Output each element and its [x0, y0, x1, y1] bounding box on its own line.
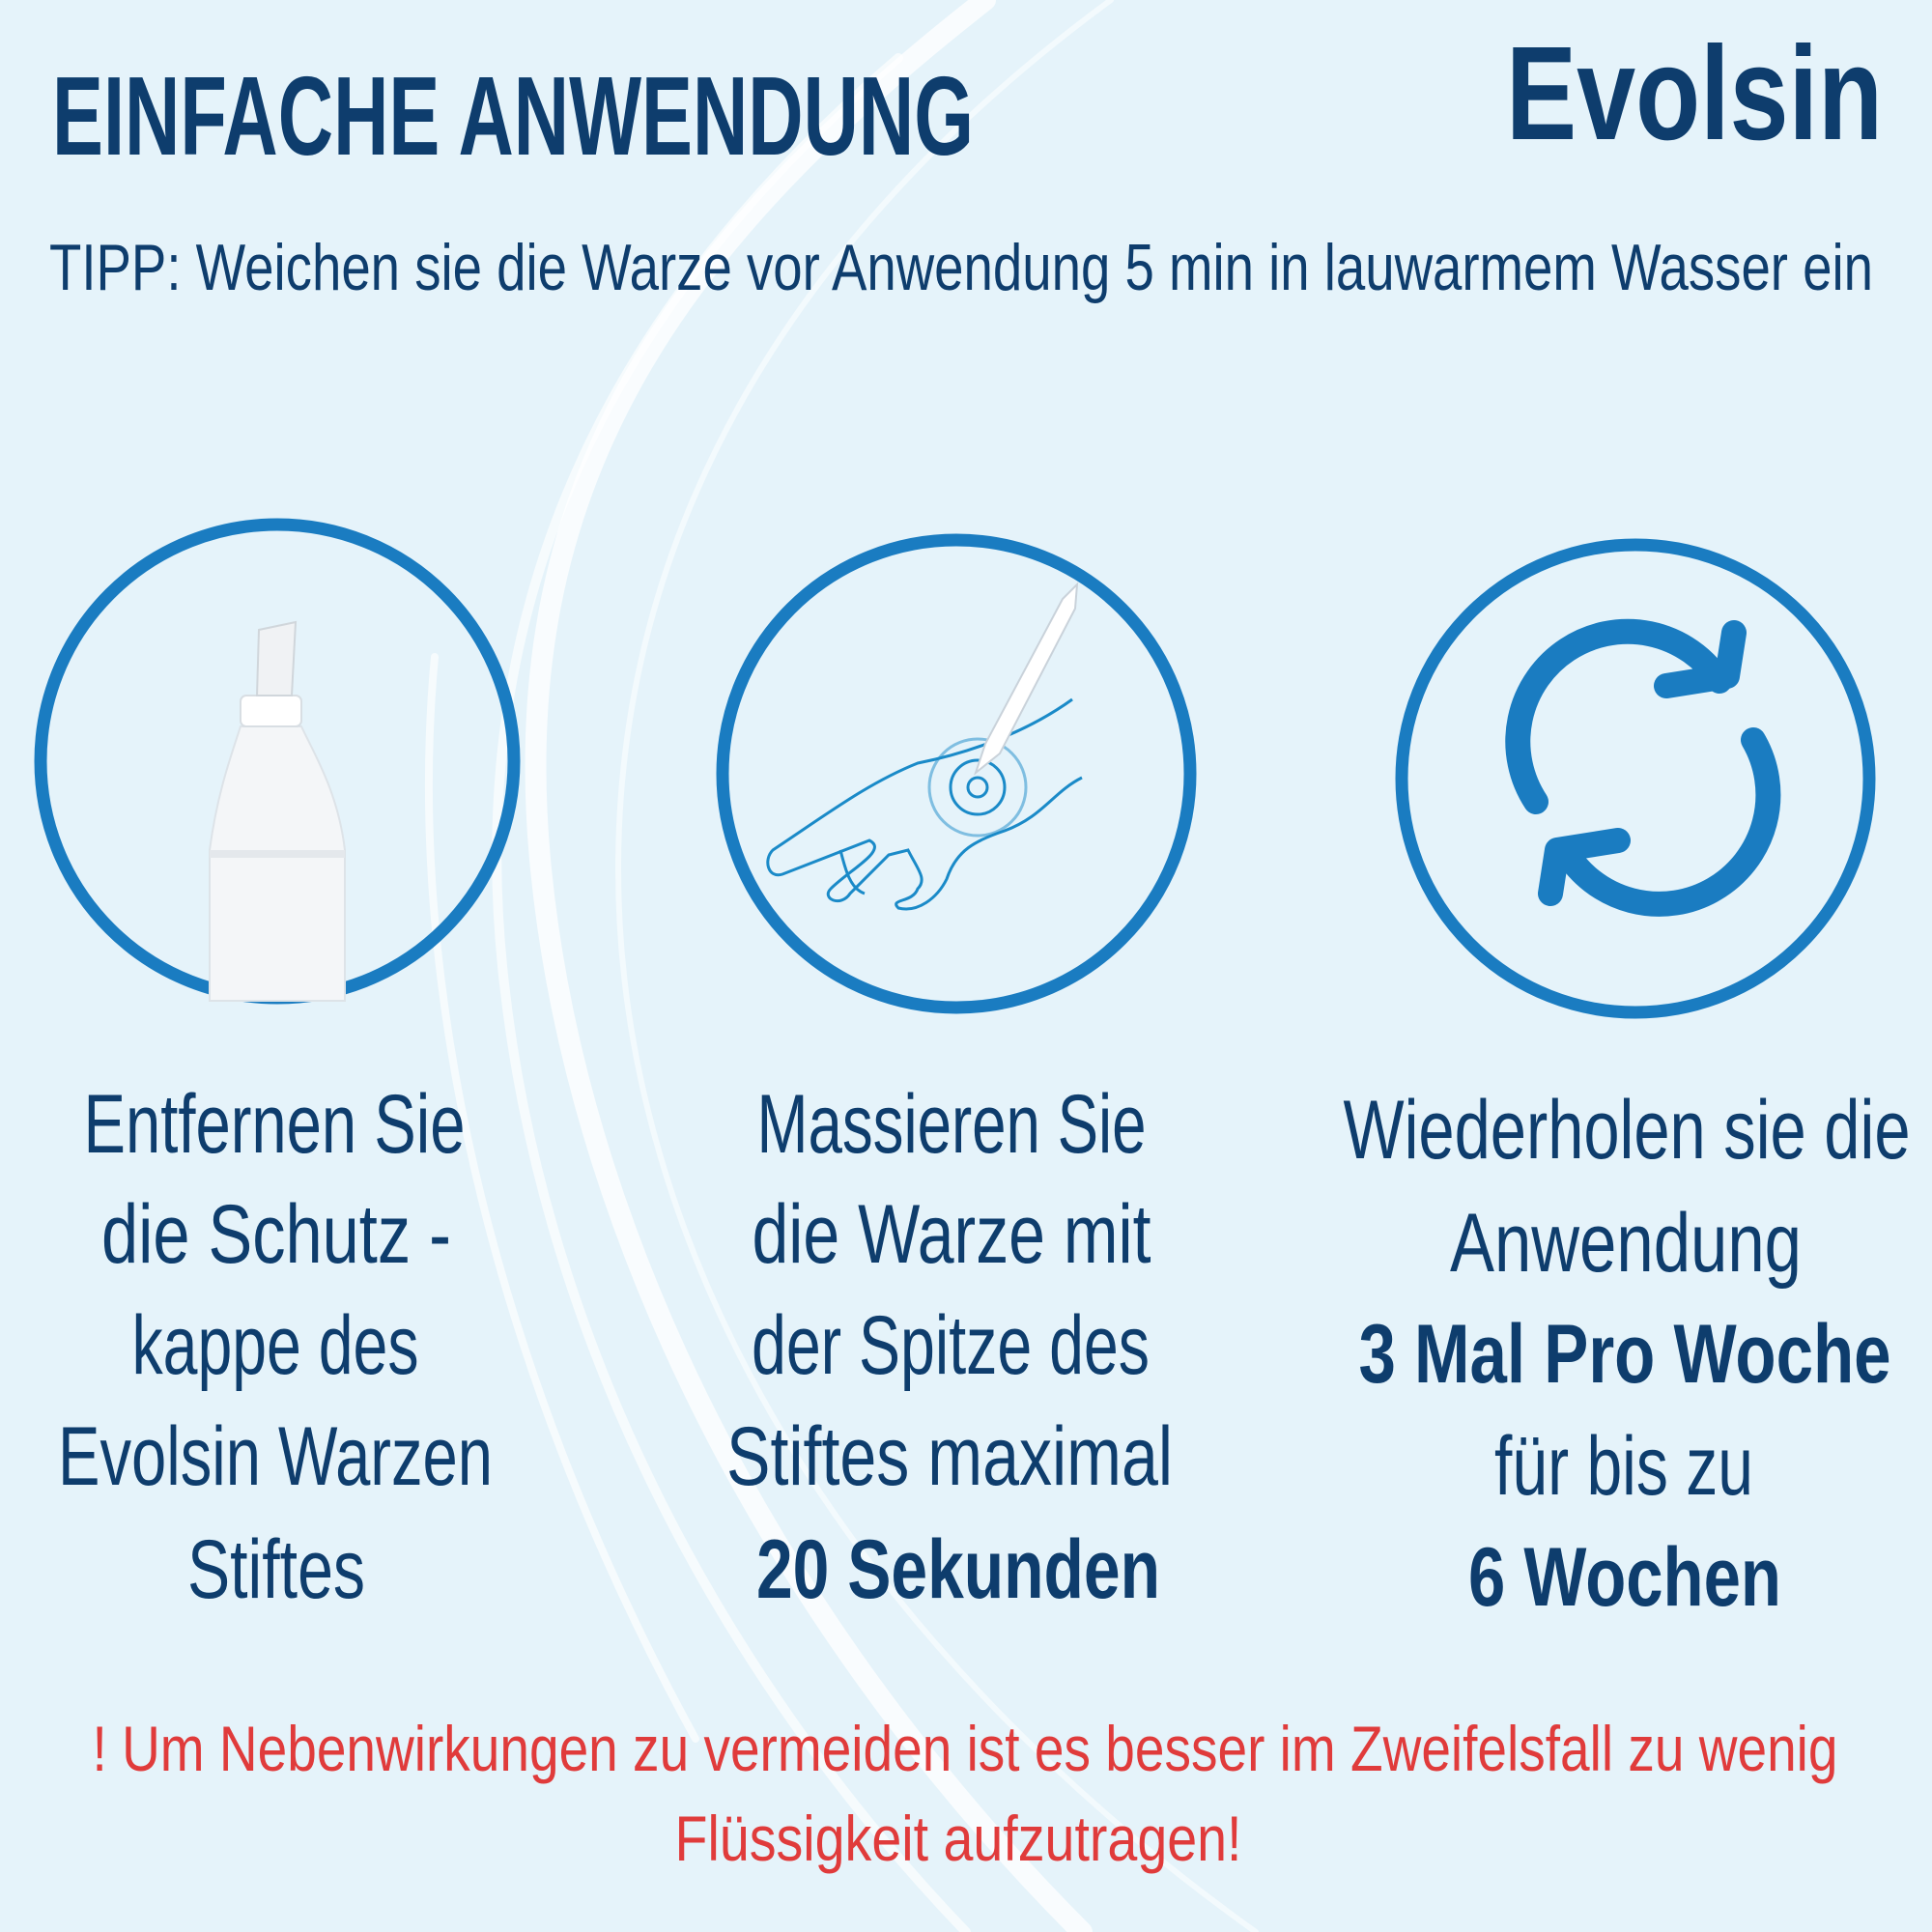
text: step 2	[726, 1078, 1173, 1616]
text: step 1	[58, 1078, 493, 1616]
text: step 1: kappe des	[131, 1299, 419, 1392]
text: step 3	[1343, 1084, 1911, 1624]
text: step 1: Evolsin Warzen	[58, 1410, 493, 1503]
text: step 3: für bis zu	[1494, 1420, 1753, 1513]
icon: hand circle	[723, 540, 1190, 1008]
text: step 3: 6 Wochen	[1468, 1531, 1781, 1624]
text: step 2: die Warze mit	[752, 1188, 1151, 1281]
text: step 2: der Spitze des	[752, 1299, 1150, 1392]
text: step 3: Anwendung	[1450, 1197, 1802, 1290]
icon: pen circle	[41, 525, 514, 1001]
text: step 1: die Schutz -	[101, 1188, 451, 1281]
text: step 1: Stiftes	[187, 1523, 365, 1616]
text: step 2: Massieren Sie	[757, 1078, 1146, 1171]
title: EINFACHE ANWENDUNG	[52, 53, 974, 179]
icon: repeat circle	[1402, 545, 1869, 1012]
text: step 2: Stiftes maximal	[726, 1410, 1173, 1503]
text: step 2: 20 Sekunden	[756, 1523, 1160, 1616]
warning text: Flüssigkeit aufzutragen!	[674, 1803, 1242, 1874]
text: step 1: Entfernen Sie	[83, 1078, 466, 1171]
warning text	[93, 1713, 1837, 1874]
